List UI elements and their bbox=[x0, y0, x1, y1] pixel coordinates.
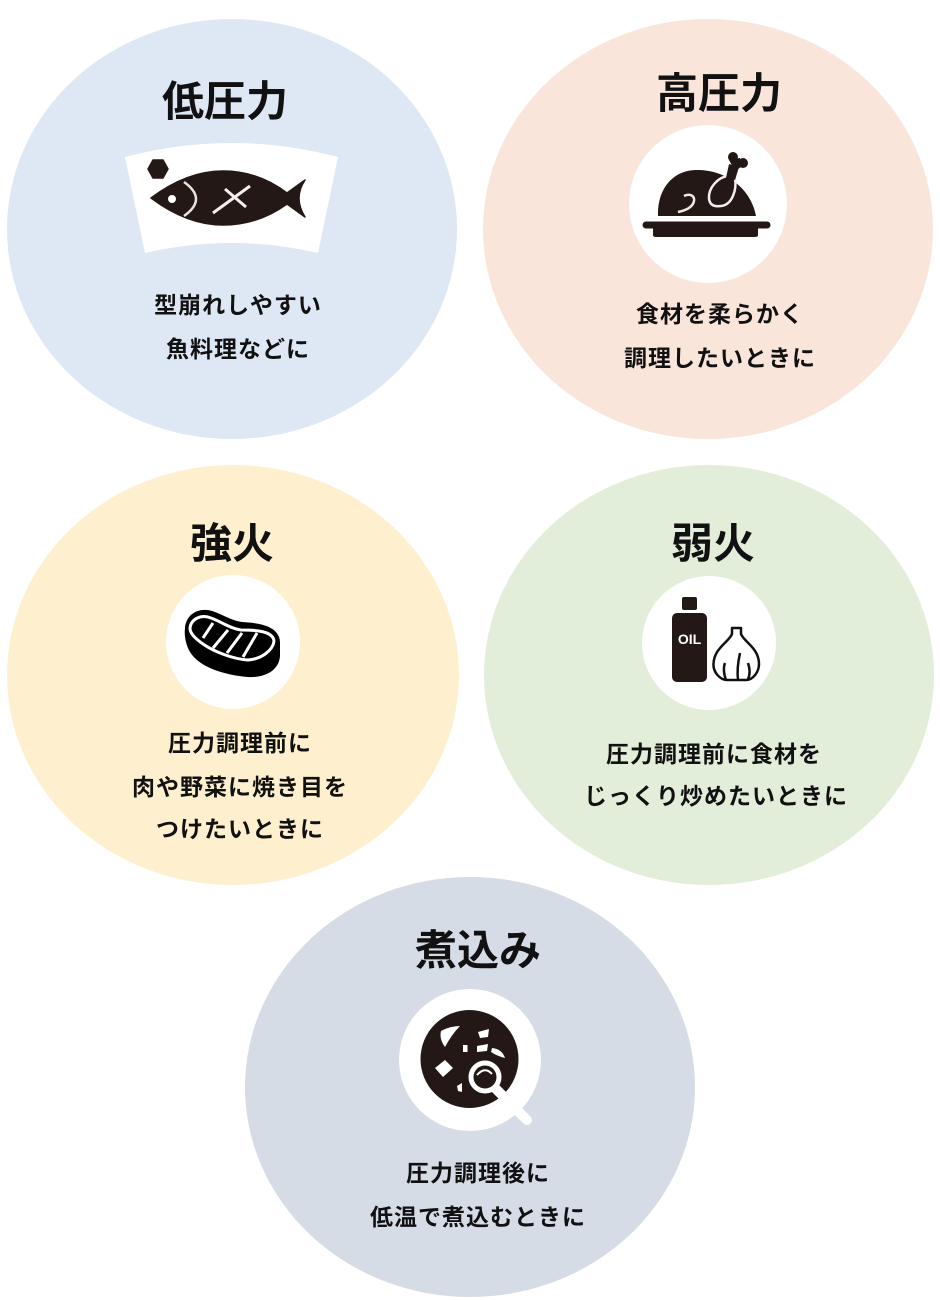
panel: low heat bbox=[484, 465, 934, 885]
text: high heat description bbox=[132, 730, 348, 842]
text: high heat description: 肉や野菜に焼き目を bbox=[132, 774, 348, 800]
heading: high heat: 強火 bbox=[190, 520, 274, 567]
icon: steak bbox=[166, 575, 300, 709]
panel: low pressure bbox=[7, 19, 457, 439]
text: low heat description: じっくり炒めたいときに bbox=[584, 783, 848, 809]
panel: high pressure bbox=[483, 19, 933, 439]
text: high heat description: つけたいときに bbox=[156, 816, 324, 842]
heading: high pressure: 高圧力 bbox=[656, 70, 782, 117]
panel: high heat bbox=[7, 465, 459, 885]
text: simmer description bbox=[370, 1160, 586, 1230]
icon: oil and garlic: OIL bbox=[678, 631, 702, 647]
icon: stew pot bbox=[399, 989, 541, 1131]
icon: fish bbox=[125, 143, 338, 253]
text: low pressure description: 型崩れしやすい bbox=[154, 292, 322, 318]
text: low pressure description: 魚料理などに bbox=[166, 336, 310, 362]
text: simmer description: 低温で煮込むときに bbox=[370, 1204, 586, 1230]
text: low pressure description bbox=[154, 292, 322, 362]
icon: oil and garlic bbox=[642, 576, 776, 710]
text: high pressure description: 食材を柔らかく bbox=[636, 301, 804, 327]
heading: simmer: 煮込み bbox=[415, 927, 541, 974]
text: high pressure description bbox=[624, 301, 816, 371]
text: low heat description bbox=[584, 741, 848, 809]
panel: simmer bbox=[245, 877, 695, 1297]
icon: roast chicken bbox=[629, 125, 787, 283]
text: low heat description: 圧力調理前に食材を bbox=[606, 741, 822, 767]
text: high pressure description: 調理したいときに bbox=[624, 345, 816, 371]
heading: low pressure: 低圧力 bbox=[162, 78, 288, 125]
text: high heat description: 圧力調理前に bbox=[168, 730, 312, 756]
text: simmer description: 圧力調理後に bbox=[406, 1160, 550, 1186]
heading: low heat: 弱火 bbox=[671, 520, 755, 567]
